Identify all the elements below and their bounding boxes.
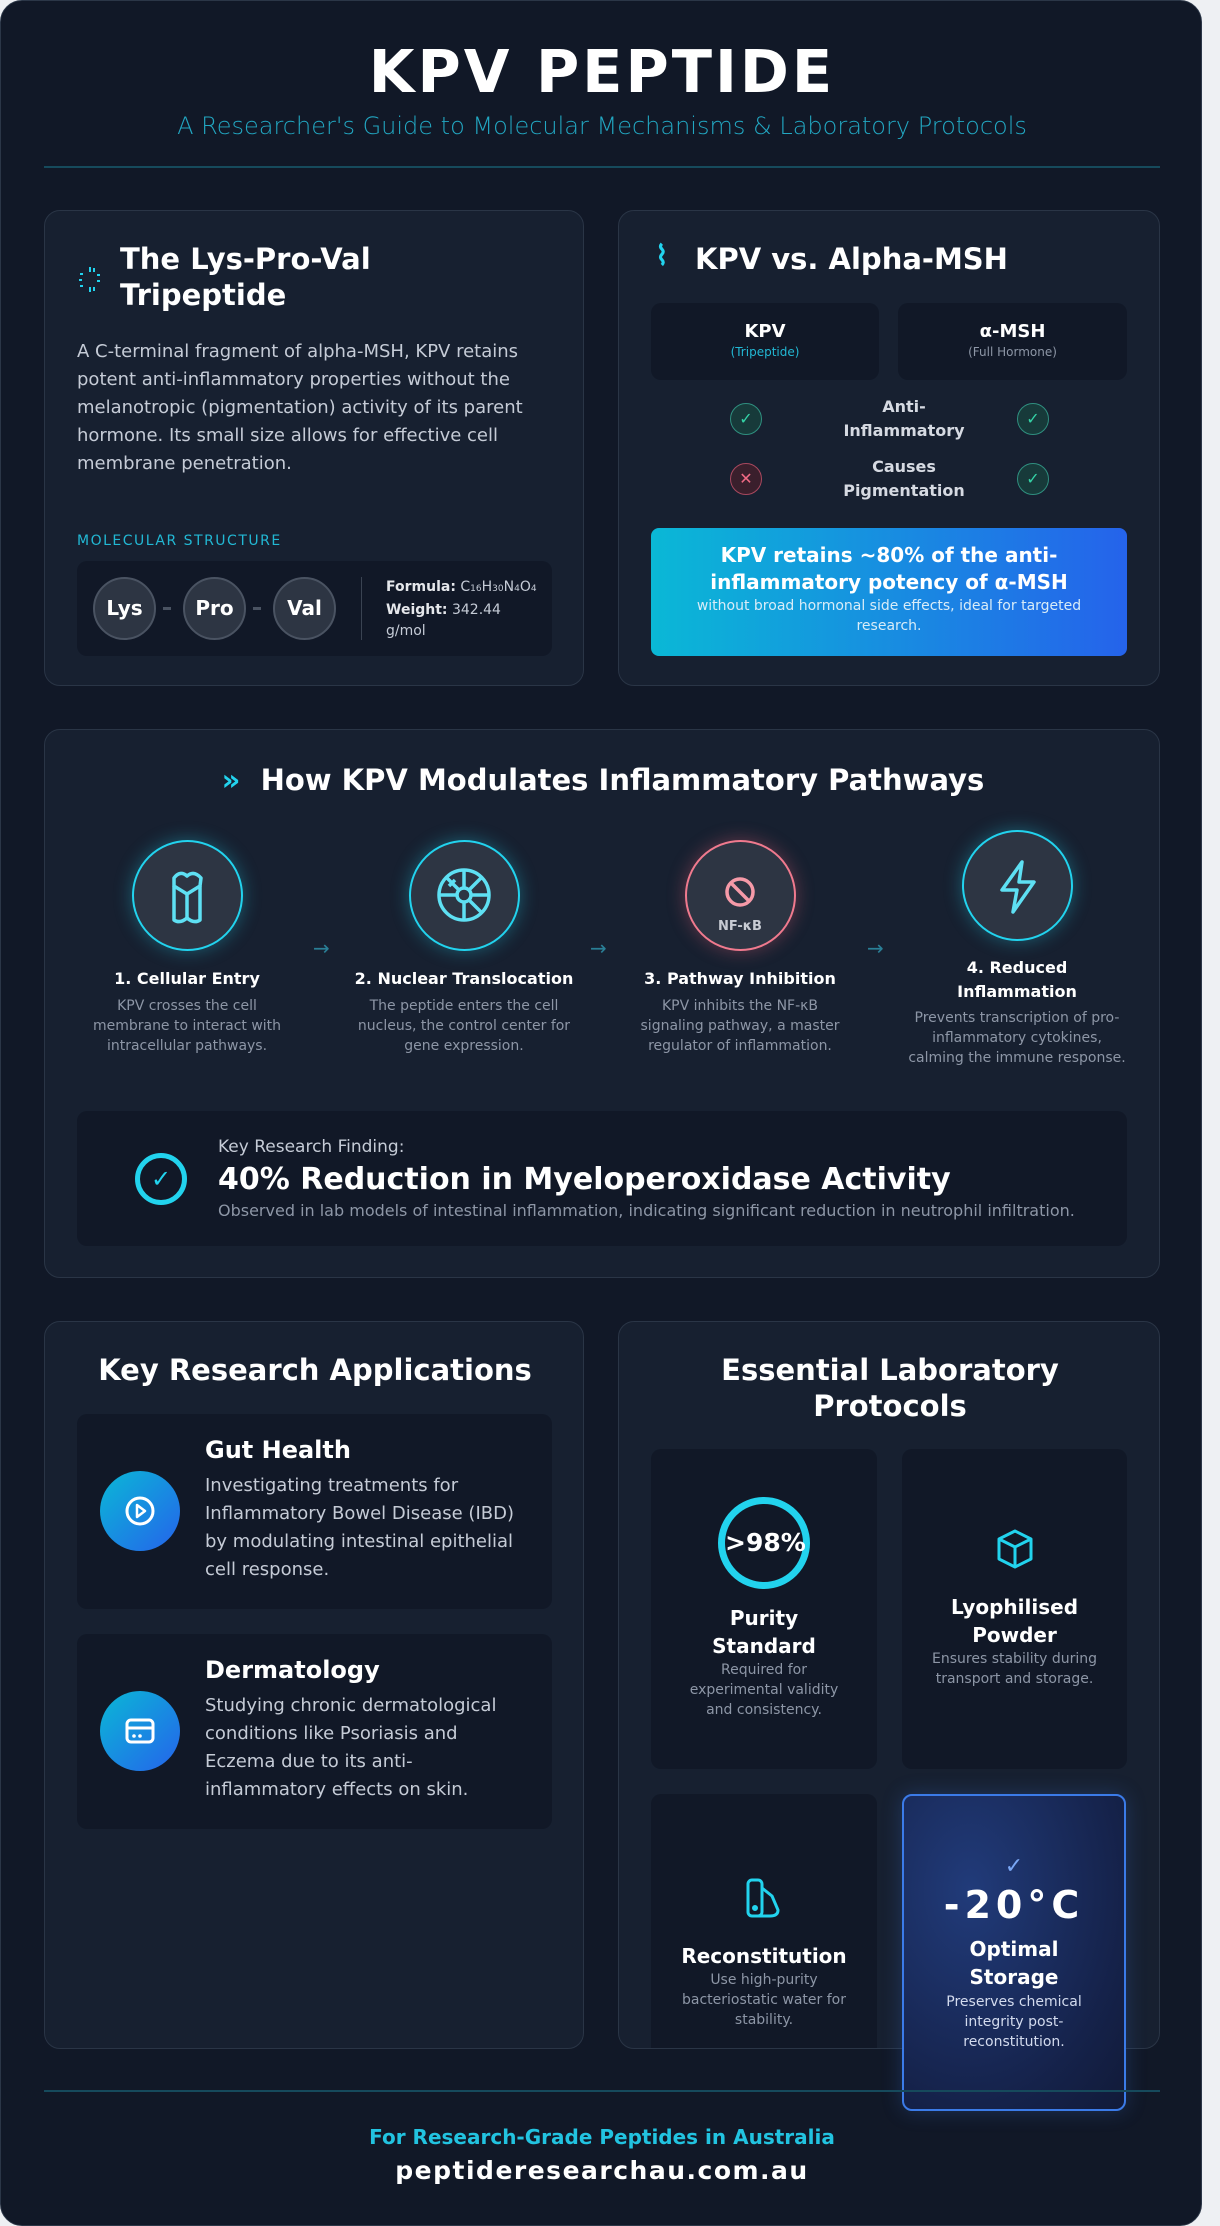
card: reconstitution: Reconstitution: [681, 1944, 847, 1968]
card: lyophilised: Lyophilised: [951, 1595, 1078, 1619]
step 2: nuclear translocation: [355, 832, 573, 1054]
card: optimal storage: ✓: [1005, 1854, 1023, 1879]
row: causes pigmentation: Pigmentation: [843, 481, 965, 500]
header: KPV: KPV: [744, 321, 786, 342]
heading: Protocols: [813, 1389, 967, 1423]
header: alpha-MSH: (Full Hormone): [968, 345, 1057, 359]
card: optimal storage: Storage: [970, 1965, 1058, 1989]
step 3: pathway inhibition: [641, 830, 840, 1054]
step 2: nuclear translocation: The peptide enters the cell nucleus, the control center for gene expression.: [358, 998, 570, 1054]
row: anti-inflammatory: [730, 397, 1049, 440]
residue Lys: Lys: [106, 596, 143, 620]
callout: key research finding: 40% Reduction in Myeloperoxidase Activity: [218, 1162, 951, 1197]
panel: Lys-Pro-Val tripeptide: [44, 210, 584, 686]
step 2: nuclear translocation: 2. Nuclear Translocation: [355, 969, 573, 988]
card: lyophilised: [902, 1449, 1127, 1769]
residue Pro: Pro: [195, 596, 234, 620]
card: optimal storage: [902, 1794, 1126, 2111]
ring: >98%: [718, 1497, 810, 1589]
ring: >98%: >98%: [725, 1528, 806, 1557]
title: KPV PEPTIDE: [369, 37, 835, 106]
icon: check circle: ✓: [151, 1165, 171, 1193]
row: anti-inflammatory: ✓: [1026, 409, 1040, 428]
arrow 2: →: [590, 936, 607, 960]
card: purity: [651, 1449, 877, 1769]
icon: skin: [100, 1691, 180, 1771]
card: dermatology: Dermatology: [205, 1656, 380, 1684]
formula and weight: g/mol: [386, 623, 426, 639]
icon: molecule dots: [79, 267, 100, 292]
residue Pro: [183, 577, 246, 640]
step 1: cellular entry: KPV crosses the cell membrane to interact with intracellular pathways.: [93, 998, 281, 1054]
icon: check circle: [135, 1153, 187, 1205]
subtitle: A Researcher's Guide to Molecular Mechanisms & Laboratory Protocols: [177, 112, 1027, 140]
card: gut health: Investigating treatments for Inflammatory Bowel Disease (IBD) by modulating intestinal epithelial cell response.: [205, 1475, 514, 1580]
card: lyophilised: Powder: [972, 1623, 1057, 1647]
card: reconstitution: [651, 1794, 877, 2094]
step 3: pathway inhibition: KPV inhibits the NF-κB signaling pathway, a master regulator of inflammation.: [641, 998, 839, 1054]
row: causes pigmentation: ✕: [739, 469, 753, 488]
callout: key research finding: [77, 1111, 1127, 1246]
step 4: reduced inflammation: [908, 822, 1126, 1066]
step 3: pathway inhibition: 3. Pathway Inhibition: [644, 969, 836, 988]
callout: 80% potency: KPV retains ~80% of the anti-inflammatory potency of α-MSH: [710, 543, 1068, 594]
icon: dna: ⌇: [655, 239, 669, 272]
row: causes pigmentation: ✓: [1026, 469, 1040, 488]
callout: 80% potency: without broad hormonal side effects, ideal for targeted research.: [697, 598, 1081, 634]
heading: Key Research Applications: [98, 1353, 532, 1387]
callout: key research finding: Key Research Finding:: [218, 1137, 404, 1157]
residue Val: [273, 577, 336, 640]
heading: [721, 1353, 1059, 1423]
card: dermatology: [77, 1634, 552, 1829]
step 1: cellular entry: 1. Cellular Entry: [114, 969, 260, 988]
card: dermatology: Studying chronic dermatological conditions like Psoriasis and Eczema due to its anti-inflammatory effects on skin.: [205, 1695, 496, 1800]
card: lyophilised: Ensures stability during transport and storage.: [932, 1651, 1097, 1687]
card: purity: Purity: [730, 1606, 798, 1630]
step 1: cellular entry: [93, 832, 281, 1054]
panel: KPV vs Alpha-MSH: [618, 210, 1160, 686]
icon: gut: [100, 1471, 180, 1551]
residue Lys: [93, 577, 156, 640]
card: purity: Required for experimental validity and consistency.: [690, 1662, 838, 1718]
row: causes pigmentation: [730, 457, 1049, 500]
panel: key research applications: [44, 1321, 584, 2049]
footer url: peptideresearchau.com.au: [395, 2156, 809, 2185]
step 3: pathway inhibition: NF-κB: [718, 919, 762, 934]
card: optimal storage: -20°C: [944, 1883, 1084, 1927]
panel: inflammatory pathways: [44, 729, 1160, 1278]
footer tagline: For Research-Grade Peptides in Australia: [369, 2125, 835, 2149]
formula and weight: Weight: 342.44: [386, 602, 501, 618]
molecular structure box: [77, 561, 552, 656]
arrow 3: →: [867, 936, 884, 960]
header: alpha-MSH: α-MSH: [980, 321, 1045, 342]
icon: vial: [746, 1878, 780, 1918]
residue Val: Val: [287, 596, 322, 620]
step 4: reduced inflammation: Inflammation: [957, 982, 1077, 1001]
row: anti-inflammatory: Anti-: [882, 397, 926, 416]
heading: » How KPV Modulates Inflammatory Pathways: [222, 763, 984, 797]
header: alpha-MSH: [898, 303, 1127, 380]
card: gut health: [77, 1414, 552, 1609]
heading: The Lys-Pro-Val Tripeptide: [120, 242, 371, 312]
row: anti-inflammatory: ✓: [739, 409, 753, 428]
callout: 80% potency: [651, 528, 1127, 656]
heading: KPV vs. Alpha-MSH: [695, 242, 1008, 276]
formula and weight: Formula: C16H30N4O4: [386, 579, 537, 595]
label: molecular structure: MOLECULAR STRUCTURE: [77, 533, 282, 549]
row: causes pigmentation: Causes: [872, 457, 936, 476]
callout: key research finding: Observed in lab models of intestinal inflammation, indicating significant reduction in neutrophil infiltration.: [218, 1201, 1075, 1220]
card: optimal storage: Optimal: [970, 1937, 1058, 1961]
card: purity: Standard: [712, 1634, 816, 1658]
row: anti-inflammatory: Inflammatory: [843, 421, 965, 440]
header: KPV: (Tripeptide): [731, 345, 799, 359]
card: reconstitution: Use high-purity bacteriostatic water for stability.: [682, 1972, 846, 2028]
step 4: reduced inflammation: Prevents transcription of pro-inflammatory cytokines, calming the immune response.: [908, 1010, 1126, 1066]
panel: laboratory protocols: [618, 1321, 1160, 2049]
card: gut health: Gut Health: [205, 1436, 351, 1464]
arrow 1: →: [313, 936, 330, 960]
heading: Essential Laboratory: [721, 1353, 1059, 1387]
description: A C-terminal fragment of alpha-MSH, KPV retains potent anti-inflammatory properties without the melanotropic (pigmentation) activity of its parent hormone. Its small size allows for effective cell membrane penetration.: [77, 341, 523, 474]
step 4: reduced inflammation: 4. Reduced: [967, 958, 1067, 977]
formula and weight: [386, 579, 537, 639]
card: optimal storage: Preserves chemical integrity post-reconstitution.: [946, 1994, 1082, 2050]
icon: cube: [998, 1530, 1032, 1568]
header: KPV: [651, 303, 879, 380]
